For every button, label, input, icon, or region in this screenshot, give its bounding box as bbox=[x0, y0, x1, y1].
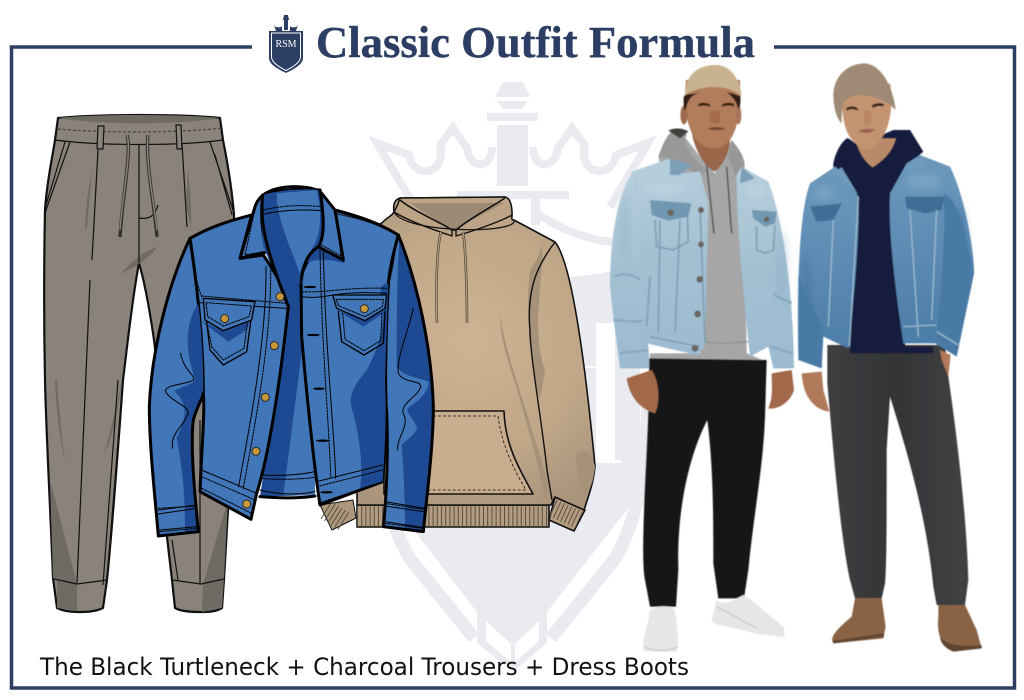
hoodie left cuff bbox=[320, 500, 356, 530]
hoodie right cuff bbox=[549, 497, 585, 531]
watermark: shield logo bbox=[377, 82, 648, 672]
man 2 navy hoodie bbox=[833, 130, 933, 353]
title: Classic Outfit Formula bbox=[316, 18, 755, 67]
joggers stitch lines bbox=[45, 125, 233, 585]
man 1 denim mottling bbox=[620, 182, 786, 303]
logo crest bbox=[269, 15, 303, 73]
man 1 upper body bbox=[610, 65, 794, 368]
jacket interior bbox=[260, 190, 323, 497]
watermark: white letter cuts bbox=[486, 323, 621, 662]
man 1 hands bbox=[627, 370, 794, 413]
joggers shading bbox=[47, 115, 228, 612]
jacket buttons bbox=[221, 293, 368, 508]
jacket right panel shading bbox=[303, 247, 388, 488]
hoodie hem rib bbox=[357, 505, 549, 527]
illustration: blue denim jacket bbox=[149, 187, 433, 536]
illustration: beige hoodie bbox=[320, 197, 595, 531]
logo crown bbox=[273, 15, 299, 31]
joggers drawstrings bbox=[120, 135, 157, 237]
hoodie drawstrings bbox=[436, 232, 467, 323]
man 2 charcoal joggers bbox=[827, 345, 968, 605]
hoodie hood bbox=[394, 197, 512, 236]
jacket left sleeve bbox=[149, 238, 203, 536]
man 1 black joggers bbox=[643, 358, 767, 607]
man 1 legs and hands bbox=[627, 358, 794, 652]
jacket right front panel bbox=[301, 210, 398, 505]
man 1 buttons bbox=[667, 207, 769, 352]
logo shield bbox=[269, 31, 303, 73]
jacket buttonholes bbox=[304, 286, 333, 493]
hoodie pouch pocket bbox=[384, 411, 533, 494]
photo: man in light denim jacket and cap bbox=[610, 65, 794, 652]
man 2 legs and hands bbox=[802, 345, 982, 652]
man 2 denim mottling bbox=[802, 174, 966, 333]
hoodie sleeve seam bbox=[529, 242, 555, 500]
man 2 beanie bbox=[833, 63, 896, 123]
man 2 suede boots bbox=[832, 598, 982, 652]
jacket left panel shading bbox=[189, 303, 203, 393]
man 2 hands bbox=[802, 350, 951, 412]
man 1 hoodie bbox=[650, 128, 767, 365]
hoodie sleeve shading bbox=[500, 245, 595, 500]
jacket right sleeve bbox=[383, 235, 433, 532]
man 2 upper body bbox=[798, 63, 974, 368]
man 2 jacket bbox=[798, 155, 974, 368]
man 1 cap bbox=[685, 65, 742, 96]
logo letters: RSM bbox=[275, 39, 297, 50]
jacket left front panel bbox=[190, 215, 288, 519]
jacket collar bbox=[240, 187, 343, 260]
watermark: tower bbox=[487, 82, 538, 186]
jacket seams and stitching bbox=[158, 237, 424, 532]
man 1 white sneakers bbox=[643, 595, 785, 652]
man 1 jacket bbox=[610, 158, 794, 368]
jacket left pocket bbox=[202, 298, 255, 365]
watermark: crown and shield band bbox=[377, 128, 648, 638]
man 2 head bbox=[842, 83, 896, 167]
illustration: grey joggers bbox=[44, 115, 234, 612]
watermark: crossbar bbox=[457, 191, 569, 225]
caption: The Black Turtleneck + Charcoal Trousers + Dress Boots bbox=[39, 653, 689, 681]
photo: man in mid-blue denim jacket and beanie bbox=[798, 63, 982, 652]
watermark: shield body bbox=[385, 265, 640, 672]
man 1 head bbox=[680, 80, 741, 172]
hoodie body bbox=[357, 197, 595, 510]
jacket right pocket bbox=[333, 295, 387, 355]
